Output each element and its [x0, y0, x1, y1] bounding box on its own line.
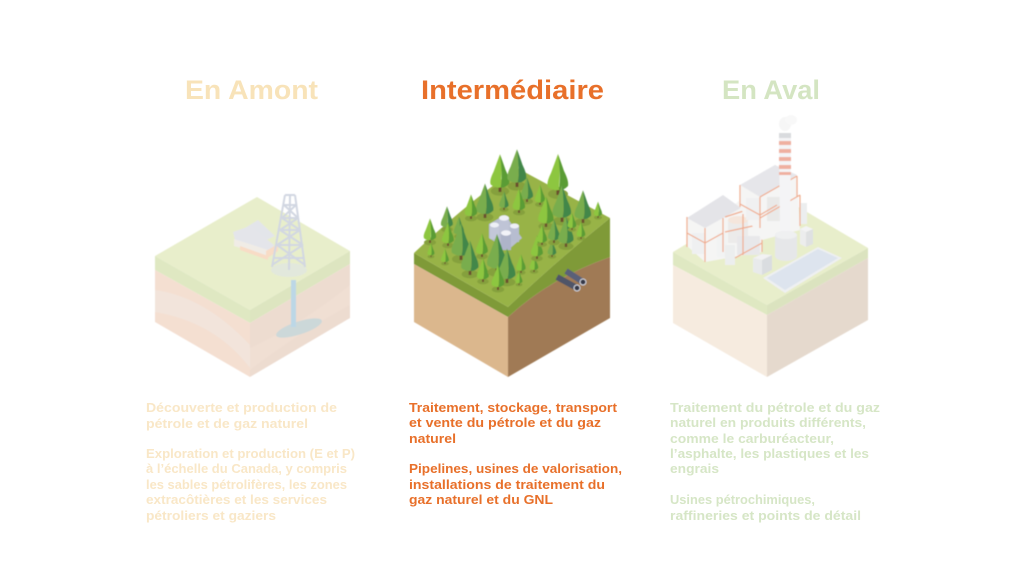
text: midstream description — [409, 401, 622, 507]
icon: pipelines — [557, 271, 586, 291]
heading: en amont: En Amont — [185, 75, 318, 105]
icon: left process unit — [687, 195, 762, 265]
icon: right process unit — [740, 165, 807, 240]
trees — [424, 149, 602, 292]
text: upstream description: les sables pétrolifères, les zones — [146, 478, 347, 492]
text: midstream description: Pipelines, usines de valorisation, — [409, 462, 622, 476]
text: upstream description: pétroliers et gaziers — [146, 509, 276, 523]
text: downstream description: naturel en produits différents, — [670, 416, 866, 430]
icon: chimney with smoke — [775, 115, 797, 261]
panel: intermédiaire — [409, 75, 622, 507]
icon: settling pool — [763, 247, 842, 293]
icon: well pipe — [291, 280, 296, 327]
panel: en amont — [146, 75, 355, 523]
text: midstream description: installations de traitement du — [409, 478, 605, 492]
text: upstream description: extracôtières et les services — [146, 493, 327, 507]
text: upstream description: Exploration et production (E et P) — [146, 447, 355, 461]
text: downstream description: l’asphalte, les plastiques et les — [670, 447, 869, 461]
text: downstream description: Traitement du pétrole et du gaz — [670, 401, 880, 415]
text: midstream description: Traitement, stockage, transport — [409, 401, 618, 415]
text: downstream description: raffineries et points de détail — [670, 509, 861, 523]
text: midstream description: naturel — [409, 432, 456, 446]
text: upstream description: Découverte et production de — [146, 401, 337, 415]
icon: small equipment — [753, 226, 813, 275]
text: upstream description: pétrole et de gaz naturel — [146, 417, 308, 431]
text: downstream description: engrais — [670, 462, 719, 476]
text: midstream description: gaz naturel et du GNL — [409, 493, 553, 507]
icon: oil reservoir — [274, 314, 324, 342]
heading: en aval: En Aval — [722, 75, 820, 105]
heading: intermédiaire: Intermédiaire — [421, 75, 604, 105]
text: upstream description — [146, 401, 355, 523]
block diagram: upstream oil well — [155, 195, 350, 377]
block diagram: downstream refinery — [673, 115, 868, 377]
icon: derrick tower — [271, 195, 307, 277]
text: downstream description: comme le carburéacteur, — [670, 432, 834, 446]
icon: storage tanks — [489, 215, 522, 250]
block diagram: midstream forest — [414, 149, 610, 377]
text: upstream description: à l’échelle du Canada, y compris — [146, 462, 347, 476]
text: downstream description: Usines pétrochimiques, — [670, 493, 815, 507]
panel: en aval — [670, 75, 880, 523]
text: midstream description: et vente du pétrole et du gaz — [409, 416, 601, 430]
text: downstream description — [670, 401, 880, 523]
icon: processing building — [233, 220, 278, 260]
